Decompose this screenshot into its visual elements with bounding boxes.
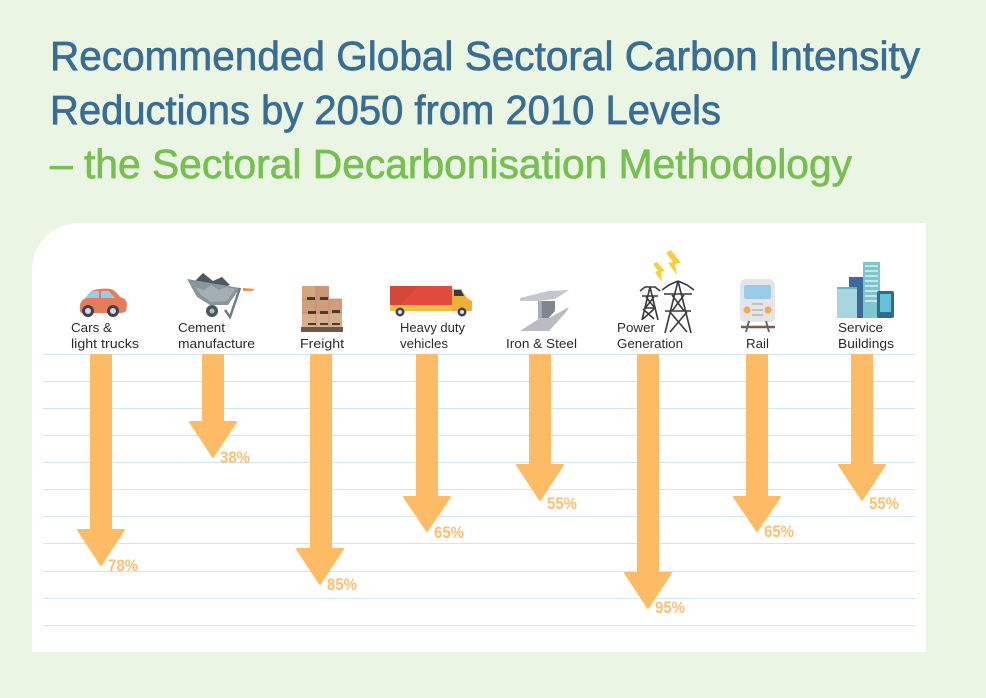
icon: train <box>740 279 775 332</box>
label: cars: light trucks <box>71 336 140 351</box>
label: cars: Cars & <box>71 320 112 335</box>
arrow: rail 65%: 65% <box>764 523 794 541</box>
label: iron and steel: Iron & Steel <box>506 336 577 351</box>
label: cars <box>71 320 140 351</box>
label: service buildings: Buildings <box>838 336 895 351</box>
label: power generation: Power <box>617 320 656 335</box>
panel: chart background <box>32 223 926 652</box>
title: Recommended Global Sectoral Carbon Intensity <box>50 33 920 79</box>
arrow: cars and light trucks 78%: 78% <box>108 557 138 575</box>
arrow: cars and light trucks 78% <box>78 355 138 575</box>
label: cement: Cement <box>178 320 225 335</box>
icon: steel beam <box>520 290 569 331</box>
icon: lightning bolts <box>653 250 681 282</box>
label: cement: manufacture <box>178 336 255 351</box>
icon: wheelbarrow <box>187 273 255 317</box>
icon: car <box>80 289 127 317</box>
label: rail: Rail <box>746 336 769 351</box>
label: heavy duty vehicles <box>400 320 465 351</box>
label: power generation <box>617 320 683 351</box>
icon: stacked boxes <box>301 286 343 332</box>
label: cement <box>178 320 255 351</box>
arrow: freight 85% <box>297 355 357 594</box>
arrow: service buildings 55% <box>839 355 899 513</box>
arrow: service buildings 55%: 55% <box>869 495 899 513</box>
arrow: heavy duty vehicles 65%: 65% <box>434 524 464 542</box>
title <box>50 33 920 187</box>
arrow: iron and steel 55% <box>517 355 577 513</box>
label: power generation: Generation <box>617 336 683 351</box>
label: service buildings: Service <box>838 320 883 335</box>
title: Reductions by 2050 from 2010 Levels <box>50 87 721 133</box>
icon: buildings <box>837 262 894 318</box>
arrow: freight 85%: 85% <box>327 576 357 594</box>
arrow: cement 38%: 38% <box>220 449 250 467</box>
label: service buildings <box>838 320 895 351</box>
label: freight: Freight <box>300 336 344 351</box>
label: heavy duty vehicles: Heavy duty <box>400 320 465 335</box>
arrow: power generation 95% <box>625 355 685 617</box>
arrow: iron and steel 55%: 55% <box>547 495 577 513</box>
icon: pylons <box>640 281 694 333</box>
icon: truck <box>390 286 472 316</box>
title: – the Sectoral Decarbonisation Methodology <box>50 141 852 187</box>
arrow: cement 38% <box>190 355 250 467</box>
arrow: heavy duty vehicles 65% <box>404 355 464 542</box>
arrow: power generation 95%: 95% <box>655 599 685 617</box>
label: heavy duty vehicles: vehicles <box>400 336 449 351</box>
arrow: rail 65% <box>734 355 794 541</box>
